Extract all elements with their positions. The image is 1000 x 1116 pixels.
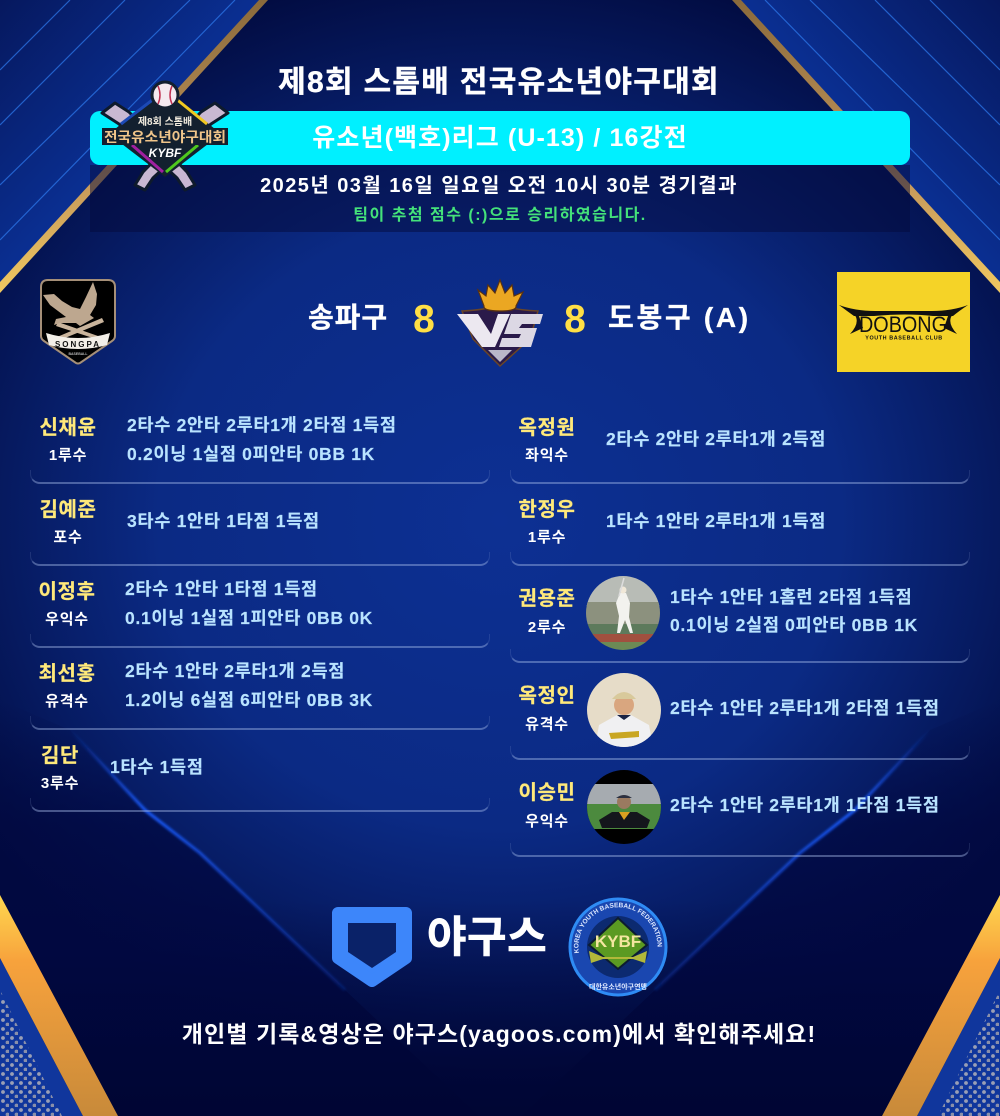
photo: player in uniform — [587, 673, 661, 747]
photo: player on field — [587, 770, 661, 844]
player row: 최선홍: 1.2이닝 6실점 6피안타 0BB 3K — [125, 690, 373, 710]
league banner: 유소년(백호)리그 (U-13) / 16강전 — [312, 124, 688, 152]
player row: 옥정인: 유격수 — [525, 716, 569, 733]
bottom-left — [0, 958, 83, 1116]
tournament logo: 전국유소년야구대회 — [104, 129, 226, 145]
player row: 권용준: 0.1이닝 2실점 0피안타 0BB 1K — [670, 615, 918, 635]
player row: 이정후: 0.1이닝 1실점 1피안타 0BB 0K — [125, 608, 373, 628]
player row: 한정우: 1타수 1안타 2루타1개 1득점 — [606, 511, 826, 531]
player row: 이정후: 우익수 — [45, 611, 89, 628]
Yagoos wordmark: 야구스 — [427, 914, 547, 962]
player row: 옥정인: 2타수 1안타 2루타1개 2타점 1득점 — [670, 698, 940, 718]
player row: 한정우 — [510, 498, 970, 566]
player row: 김예준: 3타수 1안타 1타점 1득점 — [127, 511, 320, 531]
team name: Songpa: 송파구 — [308, 302, 388, 333]
player row: 신채윤: 0.2이닝 1실점 0피안타 0BB 1K — [127, 444, 375, 464]
win note: 팀이 추첨 점수 (:)으로 승리하였습니다. — [353, 207, 647, 224]
player row: 최선홍 — [30, 661, 490, 730]
player row: 이승민 — [510, 770, 970, 857]
team logo: Dobong: DOBONG — [859, 312, 947, 337]
league banner — [90, 111, 910, 165]
Yagoos icon — [332, 907, 412, 987]
player row: 이정후 — [30, 579, 490, 648]
team logo: Songpa — [40, 279, 116, 364]
team logo: Dobong: YOUTH BASEBALL CLUB — [865, 336, 943, 342]
player row: 신채윤 — [30, 415, 490, 484]
player row: 김단: 1타수 1득점 — [110, 757, 204, 777]
team logo: Dobong — [837, 272, 970, 372]
bottom-right — [917, 958, 1000, 1116]
top-right — [738, 0, 1000, 285]
streaks — [70, 730, 345, 990]
player row: 이승민: 이승민 — [518, 782, 576, 804]
player row: 옥정원: 2타수 2안타 2루타1개 2득점 — [606, 429, 826, 449]
tournament logo: 제8회 스톰배 — [138, 115, 192, 128]
player row: 옥정인: 옥정인 — [518, 685, 576, 707]
KYBF emblem: 대한유소년야구연맹 — [589, 982, 647, 991]
team logo: Songpa: BASEBALL — [68, 352, 88, 356]
player row: 한정우: 1루수 — [528, 529, 566, 546]
player row: 권용준: 2루수 — [528, 619, 566, 636]
player row: 옥정원: 좌익수 — [525, 447, 569, 464]
VS logo — [457, 278, 543, 367]
player row: 김예준: 김예준 — [40, 499, 96, 521]
player row: 한정우: 한정우 — [518, 499, 576, 521]
player row: 신채윤: 신채윤 — [40, 417, 96, 439]
player row: 신채윤: 2타수 2안타 2루타1개 2타점 1득점 — [127, 415, 397, 435]
team logo: Songpa: SONGPA — [55, 340, 101, 349]
player row: 권용준: 권용준 — [518, 588, 576, 610]
player row: 이승민: 2타수 1안타 2루타1개 1타점 1득점 — [670, 795, 940, 815]
KYBF emblem — [568, 898, 668, 996]
player row: 최선홍: 유격수 — [45, 693, 89, 710]
date line: 2025년 03월 16일 일요일 오전 10시 30분 경기결과 — [260, 175, 738, 197]
tournament logo: KYBF — [149, 146, 182, 160]
bottom shade — [0, 900, 1000, 1116]
footer message: 개인별 기록&영상은 야구스(yagoos.com)에서 확인해주세요! — [182, 1021, 816, 1047]
tournament logo — [100, 80, 230, 192]
player row: 최선홍: 최선홍 — [38, 663, 96, 685]
player row: 권용준 — [510, 576, 970, 663]
score: Dobong: 8 — [564, 298, 586, 341]
photo: batter — [586, 576, 660, 650]
player row: 신채윤: 1루수 — [49, 447, 87, 464]
player row: 김단: 김단 — [41, 745, 79, 767]
player row: 권용준: 1타수 1안타 1홈런 2타점 1득점 — [670, 587, 912, 607]
player row: 이정후: 이정후 — [38, 581, 96, 603]
KYBF emblem: KYBF — [595, 932, 641, 951]
player row: 옥정인 — [510, 673, 970, 760]
KYBF emblem: KOREA YOUTH BASEBALL FEDERATION — [574, 902, 662, 954]
player row: 김단 — [30, 745, 490, 812]
player row: 김예준 — [30, 499, 490, 566]
player row: 옥정원 — [510, 417, 970, 484]
player row: 김예준: 포수 — [53, 529, 83, 546]
team name: Dobong: 도봉구 (A) — [608, 302, 751, 333]
player row: 최선홍: 2타수 1안타 2루타1개 2득점 — [125, 661, 345, 681]
top-left — [0, 0, 262, 285]
player row: 이승민: 우익수 — [525, 813, 569, 830]
player row: 옥정원: 옥정원 — [518, 417, 576, 439]
title: 제8회 스톰배 전국유소년야구대회 — [278, 66, 720, 99]
header dark panel — [90, 165, 910, 232]
player row: 김단: 3루수 — [41, 775, 79, 792]
score: Songpa: 8 — [413, 298, 435, 341]
player row: 이정후: 2타수 1안타 1타점 1득점 — [125, 579, 318, 599]
